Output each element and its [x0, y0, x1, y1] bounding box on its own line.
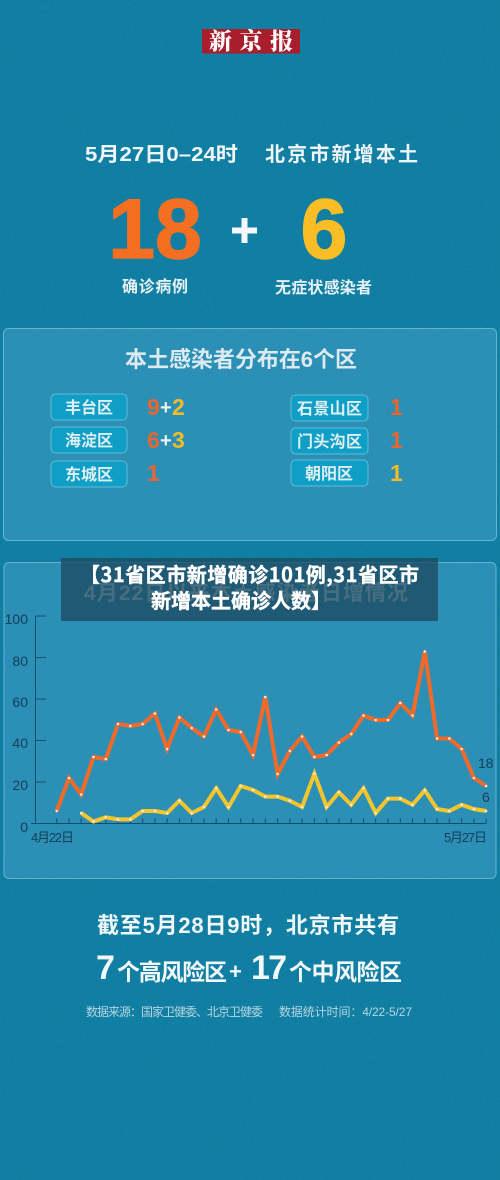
district: 东城区 [51, 460, 160, 487]
district: 朝阳区: 1 [390, 460, 403, 486]
line: confirmed cases [57, 652, 486, 811]
end value labels: 18 [478, 755, 494, 771]
stat: asymptomatic 6: 6 [301, 182, 347, 276]
stat: asymptomatic 6: 无症状感染者 [275, 278, 372, 297]
x axis labels: 5月27日 [444, 830, 487, 845]
x axis labels: 4月22日 [31, 830, 74, 845]
end value labels [478, 755, 494, 805]
summary text: risk areas [96, 913, 402, 987]
district: 丰台区: 丰台区 [65, 398, 113, 417]
data point markers [55, 650, 487, 823]
y axis [36, 616, 46, 824]
district: 石景山区: 1 [390, 394, 403, 420]
district: 门头沟区: 1 [390, 427, 403, 453]
line: asymptomatic [81, 774, 486, 822]
summary text: risk areas: 17 [251, 949, 287, 987]
plus sign [232, 228, 257, 234]
district: 海淀区: 3 [172, 427, 185, 453]
source note: 数据来源：国家卫健委、北京卫健委 [86, 1004, 263, 1019]
logo: 新京报: 新京报 [209, 23, 293, 56]
district: 石景山区 [291, 394, 403, 421]
summary text: risk areas: 个中风险区 [289, 959, 402, 985]
panel: daily trend chart [4, 562, 496, 878]
district: 丰台区 [51, 394, 185, 420]
source note [86, 1004, 412, 1019]
chart heading: 4月22日以来本土感染者日增情况 [84, 581, 408, 605]
district: 海淀区: 6 [147, 427, 160, 453]
district: 朝阳区 [291, 460, 403, 486]
district: 朝阳区: 朝阳区 [305, 465, 353, 483]
overlay caption banner: 新增本土确诊人数】 [151, 585, 331, 614]
district: 海淀区: + [160, 430, 172, 452]
panel: district distribution [4, 328, 496, 540]
heading: date and scope: 5月27日0–24时 [85, 143, 238, 166]
summary text: risk areas: + [229, 959, 242, 984]
summary text: risk areas: 7 [96, 949, 115, 987]
overlay caption banner [61, 558, 438, 621]
summary text: risk areas: 个高风险区 [117, 959, 227, 985]
district: 石景山区: 石景山区 [297, 400, 362, 418]
district: 东城区: 1 [147, 460, 160, 486]
overlay caption banner: 【31省区市新增确诊101例,31省区市 [80, 559, 419, 588]
y axis labels: 100 [5, 611, 28, 627]
stat: confirmed cases 18: 18 [108, 182, 202, 276]
y axis labels: 20 [12, 777, 28, 793]
x axis labels [31, 830, 487, 845]
district: 海淀区 [51, 427, 185, 453]
y axis labels: 0 [20, 819, 28, 835]
district: 海淀区: 海淀区 [65, 431, 113, 450]
district: 门头沟区 [291, 427, 403, 454]
summary text: risk areas: 截至5月28日9时，北京市共有 [97, 913, 399, 938]
y axis labels: 60 [12, 694, 28, 710]
plus sign vertical [242, 218, 248, 243]
panel heading: 本土感染者分布在6个区 [125, 347, 357, 372]
end value labels: 6 [482, 789, 490, 805]
district: 东城区: 东城区 [65, 465, 113, 484]
district: 丰台区: 9 [147, 394, 160, 420]
district: 丰台区: 2 [172, 394, 185, 420]
source note: 数据统计时间：4/22-5/27 [279, 1004, 412, 1019]
y axis labels [5, 611, 28, 835]
y axis labels: 80 [12, 653, 28, 669]
district: 丰台区: + [160, 397, 172, 419]
stat: asymptomatic 6 [275, 182, 372, 297]
stat: confirmed cases 18: 确诊病例 [122, 277, 188, 296]
y axis labels: 40 [12, 735, 28, 751]
heading: date and scope: 北京市新增本土 [265, 142, 418, 166]
heading: date and scope [85, 142, 418, 166]
district: 门头沟区: 门头沟区 [297, 432, 362, 451]
x axis [31, 818, 486, 824]
